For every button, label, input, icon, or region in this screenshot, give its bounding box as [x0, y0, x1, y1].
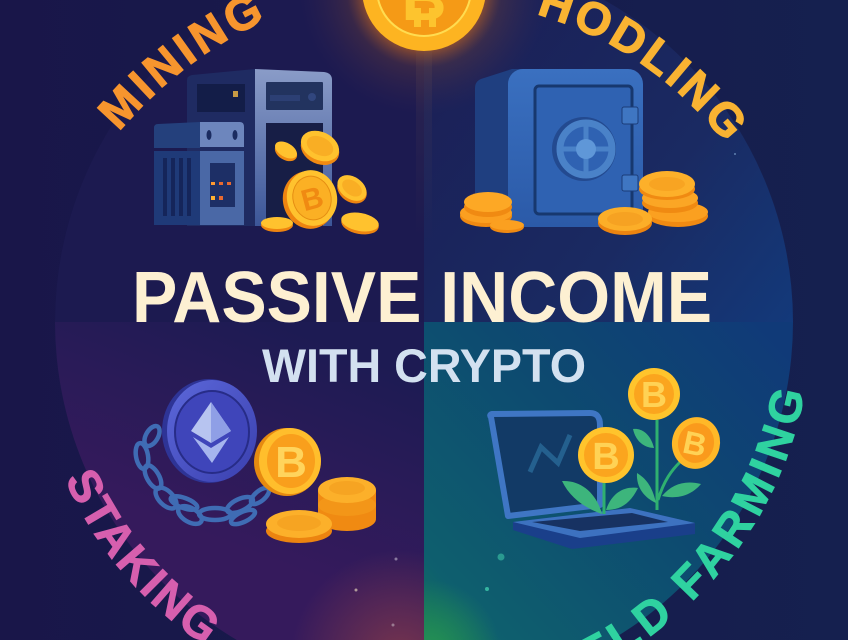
plant coins — [578, 368, 725, 483]
coin stack — [266, 477, 376, 543]
plant coins: B — [680, 424, 710, 464]
coins left — [460, 192, 524, 233]
small server box — [154, 122, 244, 225]
icon: staking ethereum coin, chain and coins — [134, 379, 376, 543]
plants — [562, 420, 701, 514]
icon: mining server with coins — [154, 69, 380, 237]
icon: safe with coins — [460, 69, 708, 235]
ethereum coin — [162, 379, 257, 483]
top center bitcoin coin — [362, 0, 486, 51]
title: PASSIVE INCOME — [132, 258, 712, 338]
subtitle: WITH CRYPTO — [262, 339, 586, 392]
bitcoin coin: B — [275, 438, 307, 487]
plant coins: B — [592, 436, 620, 478]
chain — [134, 423, 272, 528]
tower — [187, 69, 332, 226]
safe dial — [552, 117, 616, 181]
safe body — [475, 69, 643, 227]
falling coins — [261, 125, 380, 237]
bitcoin coin — [254, 428, 321, 496]
plant coins: B — [641, 374, 667, 415]
coins right — [598, 171, 708, 235]
icon: yield farming laptop with plants — [490, 368, 725, 549]
laptop — [490, 413, 695, 549]
falling coins: B — [298, 181, 327, 218]
